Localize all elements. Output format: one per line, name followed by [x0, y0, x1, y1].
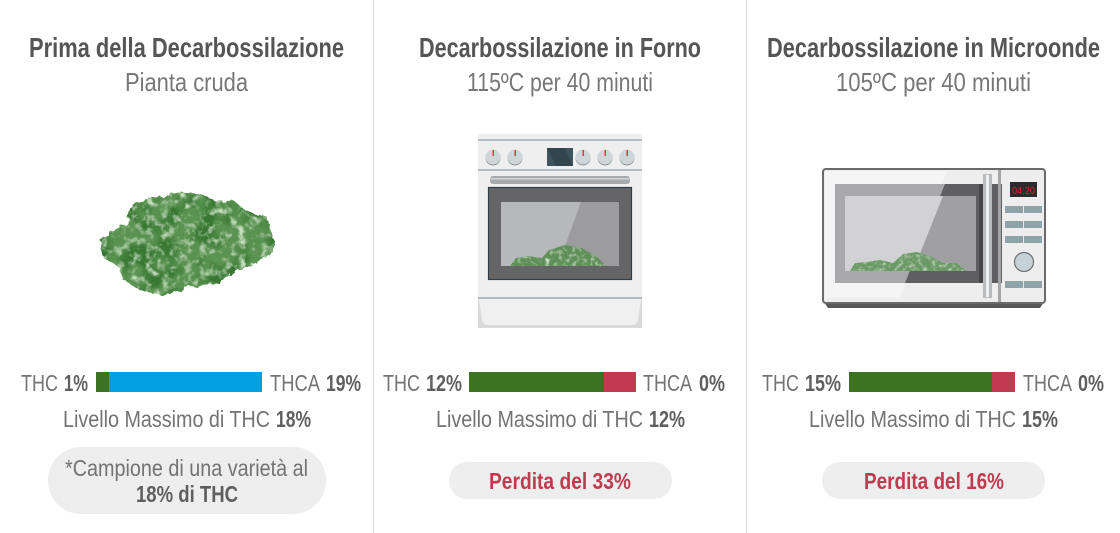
max THC level: raw: Livello Massimo di THC: [63, 406, 270, 432]
icon: microwave: [823, 169, 1045, 308]
callout: oven loss: [449, 462, 672, 499]
bar labels: oven: 0%: [699, 370, 725, 396]
icon: cannabis bud: [100, 193, 274, 295]
panel: microwave: [762, 32, 1104, 499]
bar labels: oven: THCA: [643, 370, 693, 396]
bar labels: raw: THCA: [270, 370, 321, 396]
callout: sample note: *Campione di una varietà al: [65, 455, 308, 481]
subheading: raw plant: Pianta cruda: [125, 67, 248, 97]
bar: THC vs loss oven: [469, 372, 636, 392]
bar labels: raw: [21, 370, 361, 396]
subheading: oven temperature: 115ºC per 40 minuti: [467, 67, 653, 97]
callout: oven loss: Perdita del 33%: [489, 468, 631, 494]
bar labels: raw: 1%: [64, 370, 88, 396]
max THC level: oven: Livello Massimo di THC: [436, 406, 643, 432]
max THC level: oven: 12%: [649, 406, 685, 432]
bar: THC vs loss microwave: [849, 372, 1015, 392]
max THC level: raw: 18%: [276, 406, 311, 432]
callout: microwave loss: Perdita del 16%: [864, 468, 1004, 494]
max THC level: microwave: Livello Massimo di THC: [809, 406, 1016, 432]
bar labels: oven: [383, 370, 725, 396]
bar labels: microwave: 15%: [805, 370, 841, 396]
bar labels: oven: 12%: [426, 370, 462, 396]
panel: raw plant: [21, 32, 361, 514]
callout: sample note: [48, 447, 326, 514]
icon: oven: [478, 134, 642, 328]
heading: oven: Decarbossilazione in Forno: [419, 32, 701, 63]
bar labels: raw: 19%: [326, 370, 361, 396]
subheading: microwave temperature: 105ºC per 40 minuti: [836, 67, 1031, 97]
bar labels: microwave: [762, 370, 1104, 396]
callout: sample note: 18% di THC: [136, 481, 238, 507]
bar labels: microwave: THC: [762, 370, 799, 396]
bar labels: microwave: THCA: [1023, 370, 1073, 396]
icon: microwave: 04:20: [1012, 186, 1035, 197]
callout: microwave loss: [822, 462, 1045, 499]
heading: before decarboxylation: Prima della Decarbossilazione: [29, 32, 344, 63]
bar labels: microwave: 0%: [1078, 370, 1104, 396]
bar labels: oven: THC: [383, 370, 420, 396]
panel: oven: [383, 32, 725, 499]
bar labels: raw: THC: [21, 370, 58, 396]
max THC level: microwave: 15%: [1022, 406, 1058, 432]
bar: THC vs THCA raw: [96, 372, 262, 392]
